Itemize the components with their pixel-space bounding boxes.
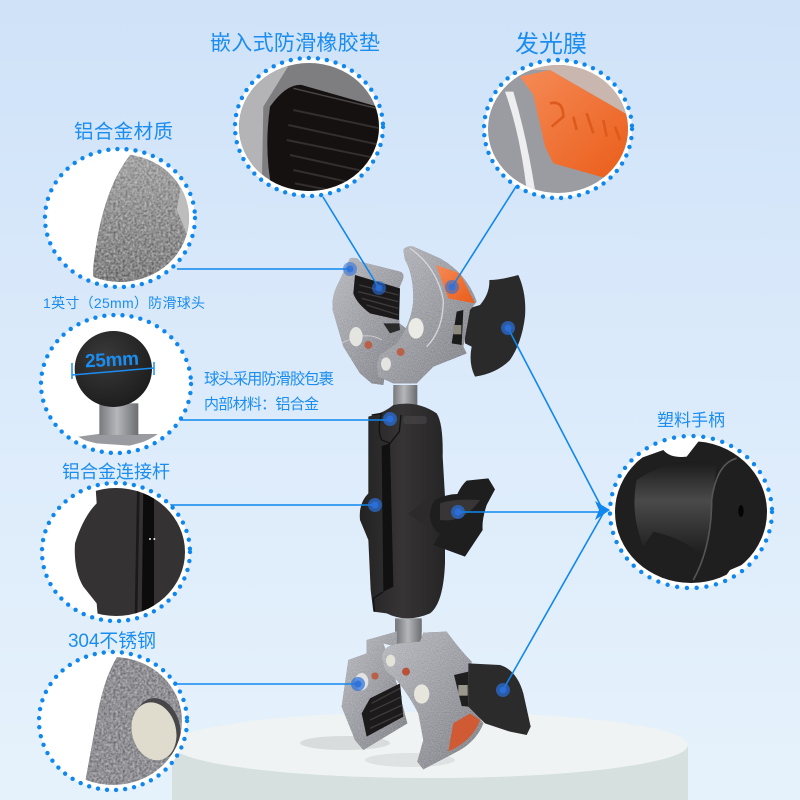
display stage bbox=[172, 712, 688, 800]
detail circle: plastic handle bbox=[607, 436, 777, 590]
product: upper clamp bbox=[332, 246, 525, 408]
heading: stainless steel: 304不锈钢 bbox=[68, 630, 156, 652]
panel: luminous film bbox=[483, 31, 637, 203]
note: ball head coating: 球头采用防滑胶包裹 bbox=[204, 370, 334, 388]
ball diameter label: 25mm bbox=[85, 349, 140, 372]
heading: plastic handle: 塑料手柄 bbox=[657, 411, 725, 430]
heading: connecting rod: 铝合金连接杆 bbox=[62, 462, 170, 482]
detail circle: rubber pad bbox=[230, 50, 390, 200]
callout lines bbox=[170, 185, 604, 690]
panel: aluminium connecting rod bbox=[42, 462, 193, 623]
detail circle: aluminium bbox=[45, 143, 203, 297]
heading: aluminium alloy material: 铝合金材质 bbox=[74, 121, 173, 143]
panel: aluminium alloy material bbox=[45, 121, 203, 297]
ball diameter marker bbox=[72, 362, 154, 379]
heading: ball head size: 1英寸（25mm）防滑球头 bbox=[43, 295, 205, 311]
detail circle: ball head bbox=[41, 315, 191, 453]
panel: 304 stainless steel bbox=[39, 630, 190, 793]
detail circle: luminous film bbox=[483, 57, 637, 203]
detail circle: connecting rod bbox=[42, 480, 193, 623]
panel: plastic handle bbox=[607, 411, 777, 590]
arrow head pointing to handle detail bbox=[595, 501, 610, 520]
product: connecting arm with knob bbox=[360, 388, 495, 632]
product: lower clamp bbox=[342, 620, 531, 769]
panel: embedded anti-slip rubber pad bbox=[210, 32, 390, 200]
heading: luminous film: 发光膜 bbox=[515, 31, 587, 58]
note: inner material: 内部材料：铝合金 bbox=[204, 396, 319, 413]
heading: rubber pad: 嵌入式防滑橡胶垫 bbox=[210, 32, 380, 55]
detail circle: stainless steel rivet bbox=[39, 652, 190, 793]
panel: 25mm ball head bbox=[41, 295, 334, 453]
callout anchor dots bbox=[343, 262, 515, 697]
